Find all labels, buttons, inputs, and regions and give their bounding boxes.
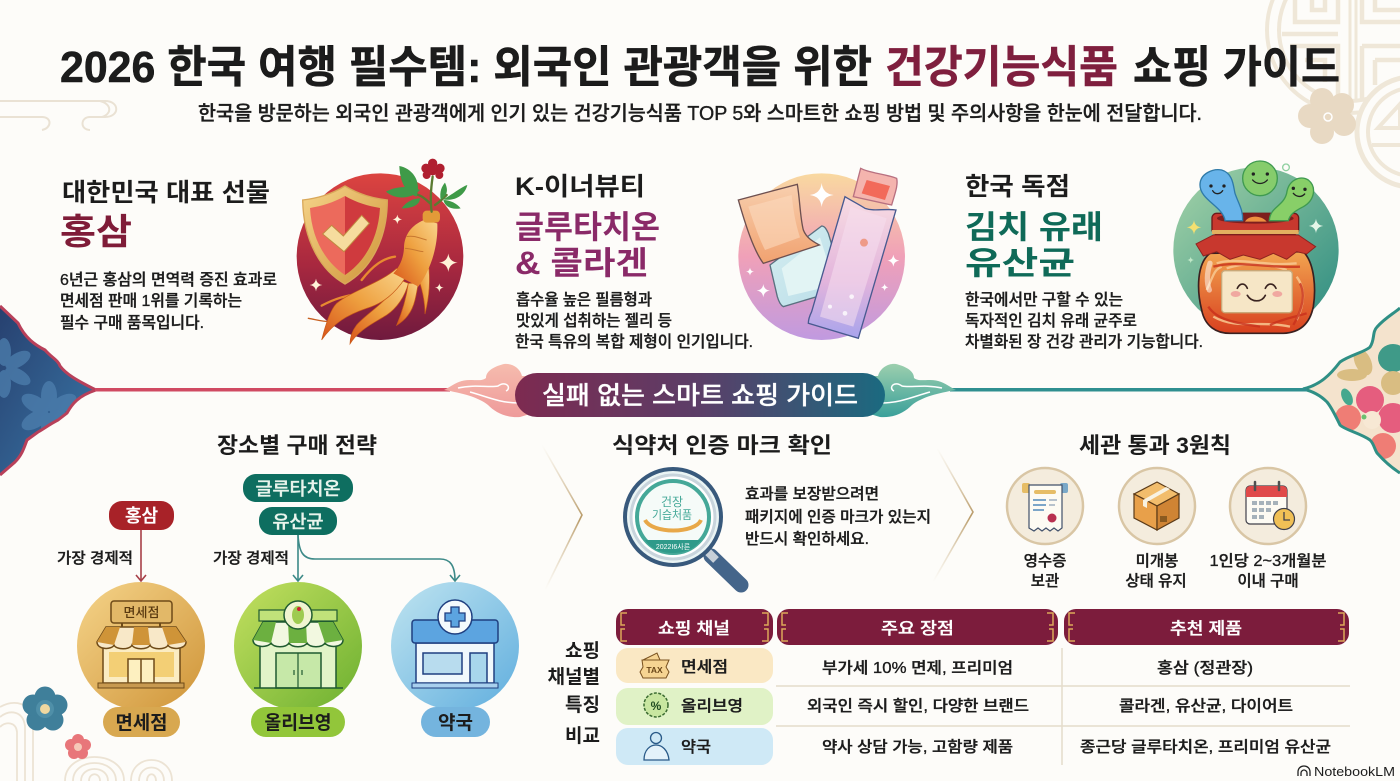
heading: purchase strategy: 장소별 구매 전략 [217, 433, 377, 458]
decoration: bottom-left arcs and flowers [0, 686, 172, 781]
icon: magnifier with mark: 기습처품 [652, 508, 692, 522]
heading: kimchi probiotics [965, 173, 1103, 281]
tag: red ginseng [109, 501, 174, 530]
side heading: channel comparison: 비교 [565, 725, 600, 747]
row: duty free: 부가세 10% 면제, 프리미엄 [822, 659, 1013, 677]
label: purchase limit [1210, 552, 1326, 590]
panel: MFDS mark check [612, 433, 931, 585]
table header: recommended products [1064, 609, 1349, 645]
text block: red ginseng description: 6년근 홍삼의 면역력 증진 효과로 [60, 271, 277, 289]
arrow: chevron divider one [542, 445, 582, 590]
row: pharmacy: 종근당 글루타치온, 프리미엄 유산균 [1080, 738, 1331, 756]
row: olive young: 외국인 즉시 할인, 다양한 브랜드 [807, 697, 1029, 715]
row: duty free: 홍삼 (정관장) [1157, 659, 1253, 677]
side heading: channel comparison: 쇼핑 [565, 640, 600, 662]
row: pharmacy [616, 728, 1331, 765]
text block: glutathione description: 한국 특유의 복합 제형이 인기입니다. [515, 333, 753, 351]
icon: blue flower [22, 686, 68, 730]
icon: film and jelly stick [738, 168, 905, 340]
heading: kimchi probiotics: 김치 유래 [965, 209, 1103, 245]
panel: purchase strategy by location [57, 433, 519, 737]
decoration: left navy ornament [0, 306, 96, 475]
table header: recommended products: 추천 제품 [1170, 619, 1242, 638]
decoration: top-right lattice and flower [1267, 0, 1400, 187]
icon: ginseng and shield [297, 159, 467, 344]
row: duty free [616, 648, 1253, 683]
text block: mark explanation: 패키지에 인증 마크가 있는지 [745, 508, 931, 526]
icon: olive young shop [234, 582, 362, 710]
icon: calendar and clock [1230, 468, 1306, 544]
text block: glutathione description [515, 291, 753, 351]
arrow: probiotics to olive young [293, 535, 303, 581]
label: keep receipt [1024, 552, 1066, 590]
text block: mark explanation: 반드시 확인하세요. [745, 530, 869, 548]
text block: kimchi description: 독자적인 김치 유래 균주로 [965, 312, 1137, 330]
arrow: chevron divider two [933, 448, 973, 582]
row: olive young: 올리브영 [681, 697, 743, 715]
panel: kimchi probiotics [965, 161, 1339, 351]
heading: customs rules: 세관 통과 3원칙 [1079, 433, 1231, 458]
arrow: red ginseng to duty free [136, 530, 146, 581]
label: duty free [103, 707, 180, 737]
heading: red ginseng: 홍삼 [60, 211, 132, 252]
panel: customs three rules [1007, 433, 1326, 590]
side heading: channel comparison: 특징 [565, 694, 600, 716]
tag: probiotics [259, 507, 337, 535]
decoration: top-left cloud lines [0, 101, 116, 130]
label: cheapest for red ginseng: 가장 경제적 [57, 550, 133, 567]
label: pharmacy: 약국 [438, 712, 473, 734]
tag: probiotics: 유산균 [272, 512, 324, 532]
icon: kimchi jar with mascots [1173, 161, 1339, 333]
panel: glutathione and collagen [515, 168, 905, 351]
heading: glutathione and collagen [515, 173, 660, 281]
icon: magnifier with mark: 건장 [661, 495, 683, 509]
row: pharmacy: 약사 상담 가능, 고함량 제품 [822, 738, 1013, 756]
heading: glutathione and collagen: 글루타치온 [515, 209, 660, 245]
row: pharmacy: 약국 [681, 738, 711, 756]
text block: kimchi description: 차별화된 장 건강 관리가 기능합니다. [965, 333, 1203, 351]
text block: red ginseng description: 면세점 판매 1위를 기록하는 [60, 292, 242, 310]
icon: duty free shop [77, 582, 205, 710]
label: cheapest for probiotics: 가장 경제적 [213, 550, 289, 567]
row: olive young: 콜라겐, 유산균, 다이어트 [1119, 697, 1293, 715]
icon: pink flower [65, 734, 91, 759]
side heading: channel comparison [548, 640, 600, 747]
table header: main benefit: 주요 장점 [881, 619, 954, 638]
label: keep receipt: 영수증 [1024, 552, 1066, 570]
title: 2026 한국 여행 필수템: 외국인 관광객을 위한 [60, 43, 872, 92]
divider lines [95, 388, 450, 392]
text block: glutathione description: 흡수율 높은 필름형과 [516, 291, 652, 309]
text block: kimchi description [965, 291, 1203, 351]
subtitle: 한국을 방문하는 외국인 관광객에게 인기 있는 건강기능식품 TOP 5와 스마트한 쇼핑 방법 및 주의사항을 한눈에 전달합니다. [198, 102, 1202, 125]
text block: kimchi description: 한국에서만 구할 수 있는 [965, 291, 1123, 309]
section banner: 실패 없는 스마트 쇼핑 가이드 [542, 382, 858, 410]
icon: duty free shop: 면세점 [124, 605, 159, 620]
label: keep receipt: 보관 [1031, 572, 1059, 590]
label: keep unopened [1125, 552, 1187, 590]
text block: red ginseng description [60, 271, 277, 332]
heading: kimchi probiotics: 유산균 [965, 245, 1075, 281]
heading: red ginseng: 대한민국 대표 선물 [62, 179, 270, 207]
label: olive young [251, 707, 345, 737]
icon: sealed box [1119, 468, 1195, 544]
heading: kimchi probiotics: 한국 독점 [965, 173, 1070, 201]
tag: glutathione: 글루타치온 [256, 479, 340, 499]
panel: red ginseng [60, 159, 467, 344]
label: purchase limit: 이내 구매 [1237, 572, 1299, 590]
label: purchase limit: 1인당 2~3개월분 [1210, 552, 1326, 570]
decoration: left cloud [444, 364, 530, 417]
label: olive young: 올리브영 [264, 712, 332, 734]
arrow: probiotics to pharmacy [298, 535, 460, 581]
title: 건강기능식품 [885, 43, 1118, 92]
icon: pharmacy [391, 582, 519, 710]
label: keep unopened: 미개봉 [1136, 552, 1178, 570]
text block: mark explanation: 효과를 보장받으려면 [745, 485, 879, 503]
text block: red ginseng description: 필수 구매 품목입니다. [60, 314, 204, 332]
heading: glutathione and collagen: K-이너뷰티 [515, 173, 645, 201]
label: duty free: 면세점 [116, 712, 168, 734]
heading: glutathione and collagen: & 콜라겐 [515, 245, 648, 281]
icon: magnifier with mark: 2022I6사른 [656, 542, 691, 551]
side heading: channel comparison: 채널별 [548, 666, 600, 688]
table header: main benefit [777, 609, 1058, 645]
label: pharmacy [421, 707, 490, 737]
title [60, 43, 1340, 92]
text block: mark explanation [745, 485, 931, 548]
heading: red ginseng [60, 179, 270, 252]
title: 쇼핑 가이드 [1133, 43, 1340, 92]
icon: magnifier with mark [625, 469, 741, 585]
row: olive young: % [651, 699, 662, 713]
section banner [515, 373, 885, 417]
text block: glutathione description: 맛있게 섭취하는 젤리 등 [516, 312, 672, 330]
table header: channel [616, 609, 773, 645]
row: duty free: 면세점 [681, 658, 728, 676]
tag: red ginseng: 홍삼 [125, 506, 158, 526]
watermark: NotebookLM: NotebookLM [1314, 765, 1395, 779]
table: shopping channel comparison [548, 609, 1350, 765]
decoration: right cloud [870, 364, 956, 417]
row: duty free: TAX [646, 665, 663, 675]
table header: channel: 쇼핑 채널 [658, 619, 730, 638]
label: keep unopened: 상태 유지 [1125, 572, 1187, 590]
heading: mark check: 식약처 인증 마크 확인 [612, 433, 832, 458]
row: olive young [616, 688, 1293, 725]
icon: receipt [1007, 468, 1083, 544]
decoration: right floral ornament [1303, 308, 1400, 473]
tag: glutathione [243, 474, 353, 502]
